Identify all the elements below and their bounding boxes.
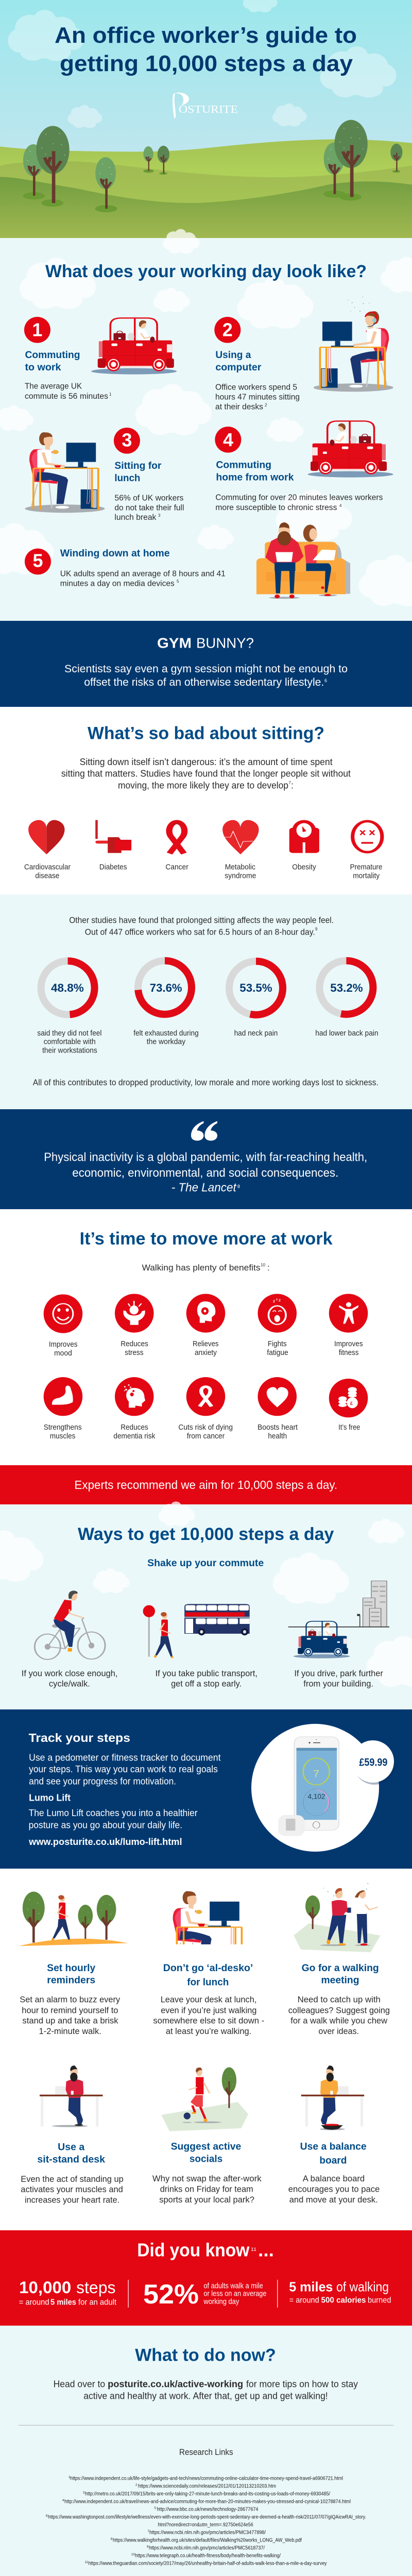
panel: step 5 winding down: minutes a day on media devices xyxy=(60,579,175,588)
text block: call to action: Head over to xyxy=(54,2379,105,2389)
panel: hero landscape xyxy=(0,0,412,244)
panel: step 5 winding down: 5 xyxy=(32,550,43,571)
heading: working day: What does your working day look like? xyxy=(45,262,367,281)
panel: active socials: sports at your local park? xyxy=(159,2195,254,2205)
panel: walking meeting: over ideas. xyxy=(318,2026,359,2036)
icons: walking benefits: mood xyxy=(54,1349,72,1358)
panel: did you know: working day xyxy=(203,2298,239,2306)
icons: walking benefits: Relieves xyxy=(193,1340,218,1348)
icons: walking benefits: Reduces xyxy=(121,1423,148,1432)
text block: benefits intro: : xyxy=(267,1263,270,1273)
panel: cycle or walk: If you work close enough, xyxy=(22,1668,117,1678)
panel: did you know: of walking xyxy=(336,2279,389,2294)
icons: health conditions: Premature xyxy=(350,863,382,871)
panel: don't go al-desko xyxy=(153,1891,264,2036)
panel: step 1 commuting to work: commute is 56 minutes xyxy=(25,392,108,401)
icons: walking benefits: dementia risk xyxy=(113,1432,156,1440)
panel: did you know: for an adult xyxy=(78,2298,117,2307)
text block: research links: https://www.sciencedaily.com/releases/2012/01/120113210203.htm xyxy=(138,2483,276,2489)
text block: research links: 2 xyxy=(135,2484,138,2487)
icons: walking benefits: health xyxy=(268,1432,287,1440)
text block: research links: http://metro.co.uk/2017/09/15/brits-are-only-taking-27-minute-lunch-breaks-and-its-costing-us-loads-of-money-6930485/ xyxy=(85,2490,330,2497)
icons: walking benefits: Improves xyxy=(49,1341,77,1349)
chart: donut 53.2% xyxy=(315,961,379,1038)
panel: step 2 using a computer: 2 xyxy=(265,403,267,408)
icons: health conditions: mortality xyxy=(353,872,380,880)
icon: reduces dementia risk xyxy=(115,1377,153,1416)
panel: Lumo Lift product: 4,102 xyxy=(308,1792,325,1801)
panel: walking meeting: Go for a walking xyxy=(302,1963,379,1974)
panel: drive and park further: If you drive, park further xyxy=(294,1668,383,1678)
text block: research links: 10 xyxy=(131,2553,135,2556)
callout: experts recommend: Experts recommend we aim for 10,000 steps a day. xyxy=(74,1478,337,1492)
decorative clouds: working day xyxy=(0,229,412,606)
title: getting 10,000 steps a day xyxy=(60,51,353,76)
panel: Lancet quote: - The Lancet xyxy=(171,1181,237,1194)
panel: step 5 winding down: Winding down at home xyxy=(60,548,170,559)
panel: active socials: socials xyxy=(190,2154,222,2165)
panel: balance board: Use a balance xyxy=(300,2142,367,2153)
panel: step 4 commuting home: Commuting for over 20 minutes leaves workers xyxy=(215,494,383,502)
heading: time to move: It’s time to move more at work xyxy=(80,1229,333,1248)
panel: don't go al-desko: Don’t go ‘al-desko’ xyxy=(163,1963,253,1974)
text block: sitting intro: : xyxy=(291,781,294,791)
icon: free coins xyxy=(329,1379,368,1417)
panel: balance board: and move at your desk. xyxy=(289,2195,378,2205)
panel: balance board: encourages you to pace xyxy=(288,2184,380,2194)
panel: set hourly reminders: Set an alarm to buzz every xyxy=(20,1995,121,2005)
panel: did you know: 5 miles xyxy=(289,2279,333,2294)
panel: active socials: drinks on Friday for team xyxy=(160,2184,253,2194)
panel: step 1 commuting to work: to work xyxy=(25,362,61,373)
text block: research links: https://www.theguardian.com/society/2017/may/26/unhealthy-britain-half-of-adults-walk-less-than-a-mile-a-day-survey xyxy=(89,2560,327,2566)
text block: research links: 8 xyxy=(111,2538,113,2541)
text block: research links: http://www.independent.co.uk/travel/news-and-advice/commuting-for-more-than-20-minutes-makes-you-stressed-and-cynical-10278874.html xyxy=(64,2498,351,2504)
panel: step 4 commuting home: home from work xyxy=(216,472,294,483)
icon: strengthens muscles xyxy=(44,1377,82,1416)
text block: research links: 6 xyxy=(46,2515,48,2518)
icons: health conditions: Diabetes xyxy=(99,863,127,871)
panel: step 4 commuting home: Commuting xyxy=(216,460,271,470)
price tag: £59.99 xyxy=(359,1757,387,1769)
panel: balance board: board xyxy=(319,2155,347,2166)
panel: did you know: burned xyxy=(368,2296,391,2304)
panel: Lancet quote xyxy=(44,1121,367,1194)
chart: donut 73.6%: the workday xyxy=(147,1038,186,1046)
panel: Lumo Lift product: 7 xyxy=(313,1769,319,1779)
panel: did you know: = around xyxy=(289,2296,319,2304)
panel: cycle or walk: cycle/walk. xyxy=(49,1679,90,1688)
panel: step 3 sitting for lunch: lunch break xyxy=(114,513,157,522)
icons: walking benefits: fitness xyxy=(339,1349,358,1357)
chart: donut 53.2%: had lower back pain xyxy=(315,1029,379,1038)
panel: sit-stand desk: increases your heart rate. xyxy=(25,2195,119,2205)
icons: walking benefits: Boosts heart xyxy=(258,1423,298,1432)
panel: did you know: of adults walk a mile xyxy=(203,2282,263,2291)
text block: other studies: Other studies have found that prolonged sitting affects the way people feel. xyxy=(69,916,334,925)
icons: health conditions: Metabolic xyxy=(225,863,255,871)
icons: walking benefits: Reduces xyxy=(121,1340,148,1348)
text block: sitting intro xyxy=(61,757,351,791)
text block: sitting intro: moving, the more likely they are to develop xyxy=(118,781,288,791)
text block: research links: 11 xyxy=(85,2561,89,2564)
icons: walking benefits: stress xyxy=(125,1349,143,1357)
panel: set hourly reminders: reminders xyxy=(47,1975,95,1986)
icons: walking benefits: It’s free xyxy=(338,1423,360,1432)
panel: step 1 commuting to work: Commuting xyxy=(25,350,80,361)
panel: public transport: get off a stop early. xyxy=(171,1679,242,1688)
panel: step 2 using a computer: hours 47 minutes sitting xyxy=(215,393,300,402)
panel: track your steps: and see your progress for motivation. xyxy=(29,1776,176,1786)
panel: gym bunny: GYM xyxy=(157,635,192,651)
panel: did you know: = around xyxy=(19,2298,49,2307)
panel: did you know xyxy=(19,2239,391,2310)
panel: track your steps: Use a pedometer or fitness tracker to document xyxy=(29,1752,220,1762)
panel: step 2 using a computer: Using a xyxy=(215,350,251,361)
heading: ways: Ways to get 10,000 steps a day xyxy=(78,1524,334,1544)
panel: active socials: Suggest active xyxy=(171,2142,241,2153)
panel: set hourly reminders: stand up and take a brisk xyxy=(22,2015,118,2025)
text block: call to action: for more tips on how to stay xyxy=(246,2379,358,2389)
chart: donut 73.6%: felt exhausted during xyxy=(133,1029,199,1038)
icons: walking benefits: z xyxy=(279,1298,281,1302)
panel: did you know: 10,000 xyxy=(19,2278,71,2297)
panel: step 2 using a computer xyxy=(214,297,393,412)
icon: improves mood xyxy=(44,1294,82,1333)
text block: call to action xyxy=(54,2379,358,2401)
panel: sit-stand desk: Use a xyxy=(58,2142,85,2153)
panel: set hourly reminders: hour to remind yourself to xyxy=(22,2005,118,2015)
panel: Lancet quote: economic, environmental, and social consequences. xyxy=(72,1166,338,1179)
panel: step 1 commuting to work: 1 xyxy=(109,392,112,397)
panel: step 4 commuting home: 4 xyxy=(223,429,233,450)
text block: call to action: posturite.co.uk/active-working xyxy=(108,2379,243,2389)
panel: track your steps: your steps. This way you can work to real goals xyxy=(29,1764,218,1774)
panel: don't go al-desko: for lunch xyxy=(187,1977,229,1988)
chart: donut 48.8%: their workstations xyxy=(42,1047,97,1055)
chart: donut 48.8%: 48.8% xyxy=(51,981,84,994)
panel: gym bunny: Scientists say even a gym session might not be enough to xyxy=(64,663,348,675)
chart: donut 53.5%: had neck pain xyxy=(234,1029,278,1038)
text block: sitting intro: sitting that matters. Studies have found that the longer people sit without xyxy=(61,768,351,778)
panel: step 2 using a computer: 2 xyxy=(222,319,233,341)
chart: donut 48.8%: said they did not feel xyxy=(37,1029,101,1038)
chart: donut 48.8%: comfortable with xyxy=(44,1038,96,1046)
panel: set hourly reminders xyxy=(19,1892,128,2036)
panel: balance board xyxy=(288,2065,380,2205)
text block: sitting intro: Sitting down itself isn’t dangerous: it’s the amount of time spent xyxy=(80,757,333,767)
icons: walking benefits: z xyxy=(273,1299,275,1303)
panel: step 4 commuting home: 4 xyxy=(339,503,342,508)
panel: Lumo Lift product xyxy=(251,1724,396,1852)
text block: consequences: All of this contributes to dropped productivity, low morale and more working days lost to sickness. xyxy=(33,1078,379,1088)
panel: step 2 using a computer: Office workers spend 5 xyxy=(215,383,297,392)
panel: step 1 commuting to work: 1 xyxy=(32,319,42,341)
panel: set hourly reminders: Set hourly xyxy=(47,1963,96,1974)
panel: gym bunny: offset the risks of an otherwise sedentary lifestyle. xyxy=(84,676,324,688)
panel: cycle or walk xyxy=(22,1590,117,1688)
text block: other studies: 9 xyxy=(315,927,318,931)
chart: donut 53.2%: 53.2% xyxy=(330,981,363,994)
icons: walking benefits: fatigue xyxy=(267,1349,288,1357)
icon: heart xyxy=(258,1377,297,1416)
panel: sit-stand desk: Even the act of standing up xyxy=(21,2174,124,2184)
panel: step 1 commuting to work xyxy=(24,317,177,401)
subheading: shake up your commute: Shake up your commute xyxy=(147,1558,264,1569)
panel: track your steps: The Lumo Lift coaches you into a healthier xyxy=(29,1808,198,1818)
icons: walking benefits: z xyxy=(276,1298,278,1301)
icon: cancer ribbon xyxy=(186,1377,225,1416)
panel: step 1 commuting to work: The average UK xyxy=(25,382,82,391)
icons: health conditions: disease xyxy=(35,872,59,880)
icons: walking benefits: anxiety xyxy=(195,1349,217,1357)
chart: donut 48.8% xyxy=(37,961,101,1055)
logo: Posturite white: OSTURITE xyxy=(179,103,238,115)
panel: step 4 commuting home xyxy=(215,421,393,512)
panel: step 5 winding down: 5 xyxy=(177,579,179,584)
panel: did you know: 52% xyxy=(143,2279,199,2310)
panel: drive and park further: from your building. xyxy=(303,1679,373,1688)
icons: health conditions: Cardiovascular xyxy=(24,863,71,871)
panel: step 3 sitting for lunch: 56% of UK workers xyxy=(114,494,184,502)
panel: track your steps: www.posturite.co.uk/lumo-lift.html xyxy=(28,1837,182,1847)
panel: drive and park further xyxy=(288,1581,389,1688)
icons: health conditions: Obesity xyxy=(292,863,316,871)
panel: walking meeting: colleagues? Suggest going xyxy=(288,2005,390,2015)
chart: donut 53.5%: 53.5% xyxy=(239,981,272,994)
text block: research links: https://www.independent.co.uk/life-style/gadgets-and-tech/news/commuting-online-calculator-time-money-spend-travel-a6906721.html xyxy=(70,2475,343,2481)
text block: research links: html?noredirect=on&utm_term=.92750e624e56 xyxy=(158,2521,253,2528)
panel: walking meeting: Need to catch up with xyxy=(298,1995,381,2005)
panel: track your steps: posture as you go about your daily life. xyxy=(29,1820,182,1830)
icons: health conditions: syndrome xyxy=(225,872,256,880)
icons: walking benefits: from cancer xyxy=(187,1432,225,1440)
icons: walking benefits: Fights xyxy=(268,1340,287,1348)
text block: benefits intro: 10 xyxy=(261,1263,265,1267)
panel: active socials xyxy=(152,2067,262,2205)
text block: research links: 7 xyxy=(147,2530,149,2533)
panel: set hourly reminders: 1-2-minute walk. xyxy=(39,2026,101,2036)
title: An office worker’s guide to xyxy=(55,23,357,48)
panel: step 3 sitting for lunch: do not take their full xyxy=(114,504,184,513)
icons: health conditions: Cancer xyxy=(165,863,188,871)
panel: did you know: 500 calories xyxy=(321,2296,366,2304)
panel: don't go al-desko: Leave your desk at lunch, xyxy=(161,1995,256,2005)
icons: health conditions xyxy=(24,820,382,880)
text block: research links: https://www.walkingforhealth.org.uk/sites/default/files/Walking%20works_LONG_AW_Web.pdf xyxy=(113,2537,302,2543)
icons: walking benefits: Strengthens xyxy=(44,1423,82,1432)
icon: reduces stress xyxy=(115,1294,153,1333)
panel: step 5 winding down: UK adults spend an average of 8 hours and 41 xyxy=(60,569,226,578)
panel: did you know: steps xyxy=(76,2278,115,2297)
panel: step 3 sitting for lunch: 3 xyxy=(122,430,132,451)
panel: did you know: ... xyxy=(258,2239,274,2260)
panel: public transport xyxy=(143,1604,258,1688)
text block: sitting intro: 7 xyxy=(288,781,291,785)
panel: step 3 sitting for lunch: Sitting for xyxy=(114,461,162,471)
icons: walking benefits xyxy=(44,1294,368,1440)
panel: sit-stand desk xyxy=(21,2065,124,2205)
panel: gym bunny: 6 xyxy=(324,678,327,683)
text block: research links: https://www.ncbi.nlm.nih.gov/pmc/articles/PMC5618737/ xyxy=(149,2545,265,2551)
panel: gym bunny xyxy=(64,635,348,688)
panel: don't go al-desko: even if you’re just walking xyxy=(161,2005,256,2015)
text block: call to action: active and healthy at work. After that, get up and get walking! xyxy=(83,2391,328,2401)
panel: Lancet quote: 8 xyxy=(237,1184,240,1189)
chart: donut 73.6% xyxy=(133,961,199,1046)
text block: research links: 5 xyxy=(154,2507,157,2510)
chart: donut 53.5% xyxy=(229,961,283,1038)
chart: donut 73.6%: 73.6% xyxy=(150,981,182,994)
panel: public transport: If you take public transport, xyxy=(156,1668,258,1678)
heading: what to do now: What to do now? xyxy=(135,2346,276,2365)
panel: step 4 commuting home: more susceptible to chronic stress xyxy=(215,503,337,512)
text block: other studies: Out of 447 office workers who sat for 6.5 hours of an 8-hour day. xyxy=(85,927,315,937)
panel: sit-stand desk: activates your muscles and xyxy=(21,2184,123,2194)
text block: research links: https://www.telegraph.co.uk/health-fitness/body/health-benefits-walking/ xyxy=(135,2552,281,2558)
icons: walking benefits: £ xyxy=(350,1401,353,1406)
panel: walking meeting: for a walk while you chew xyxy=(290,2015,388,2025)
panel: step 3 sitting for lunch xyxy=(25,428,184,522)
panel: sit-stand desk: sit-stand desk xyxy=(37,2154,105,2165)
text block: benefits intro: Walking has plenty of benefits xyxy=(142,1263,261,1273)
panel: walking meeting xyxy=(288,1883,390,2036)
heading: what's so bad: What’s so bad about sitting? xyxy=(88,723,324,743)
panel: step 3 sitting for lunch: lunch xyxy=(114,473,140,484)
icon: relieves anxiety xyxy=(186,1294,225,1333)
icon: improves fitness xyxy=(329,1294,368,1333)
panel: don't go al-desko: at least you’re walking. xyxy=(166,2026,251,2036)
panel: Lancet quote: Physical inactivity is a global pandemic, with far-reaching health, xyxy=(44,1150,367,1163)
panel: did you know: or less on an average xyxy=(203,2290,266,2298)
text block: research links: 1 xyxy=(68,2476,71,2479)
panel: track your steps xyxy=(28,1731,220,1847)
text block: other studies xyxy=(69,916,334,937)
panel: step 3 sitting for lunch: 3 xyxy=(158,513,161,518)
icon: fights fatigue xyxy=(258,1294,297,1333)
icons: walking benefits: muscles xyxy=(50,1432,75,1440)
panel: active socials: Why not swap the after-work xyxy=(152,2174,262,2183)
decorative clouds: ways xyxy=(0,1502,412,1687)
title xyxy=(55,23,357,76)
panel: walking meeting: meeting xyxy=(321,1975,359,1986)
logo: Posturite white xyxy=(173,92,238,118)
panel: gym bunny: BUNNY? xyxy=(196,635,254,651)
text block: research links xyxy=(46,2447,366,2566)
panel: track your steps: Lumo Lift xyxy=(29,1793,71,1803)
icons: walking benefits: Cuts risk of dying xyxy=(178,1423,233,1432)
text block: research links: http://www.bbc.co.uk/news/technology-28677674 xyxy=(157,2506,259,2512)
text block: research links: 3 xyxy=(83,2492,85,2495)
icons: walking benefits: Improves xyxy=(334,1340,363,1348)
text block: research links: Research Links xyxy=(179,2447,233,2457)
panel: step 2 using a computer: at their desks xyxy=(215,403,263,412)
panel: don't go al-desko: somewhere else to sit down - xyxy=(153,2015,264,2025)
panel: did you know: 11 xyxy=(251,2247,256,2252)
text block: research links: 4 xyxy=(62,2499,64,2502)
panel: step 5 winding down xyxy=(25,522,350,599)
panel: track your steps: Track your steps xyxy=(29,1731,130,1744)
panel: did you know: 5 miles xyxy=(50,2298,76,2307)
panel: balance board: A balance board xyxy=(303,2174,365,2183)
text block: research links: https://www.ncbi.nlm.nih.gov/pmc/articles/PMC3477898/ xyxy=(149,2529,266,2535)
panel: did you know: Did you know xyxy=(137,2239,250,2260)
text block: research links: 9 xyxy=(147,2546,149,2549)
panel: step 2 using a computer: computer xyxy=(215,362,262,373)
